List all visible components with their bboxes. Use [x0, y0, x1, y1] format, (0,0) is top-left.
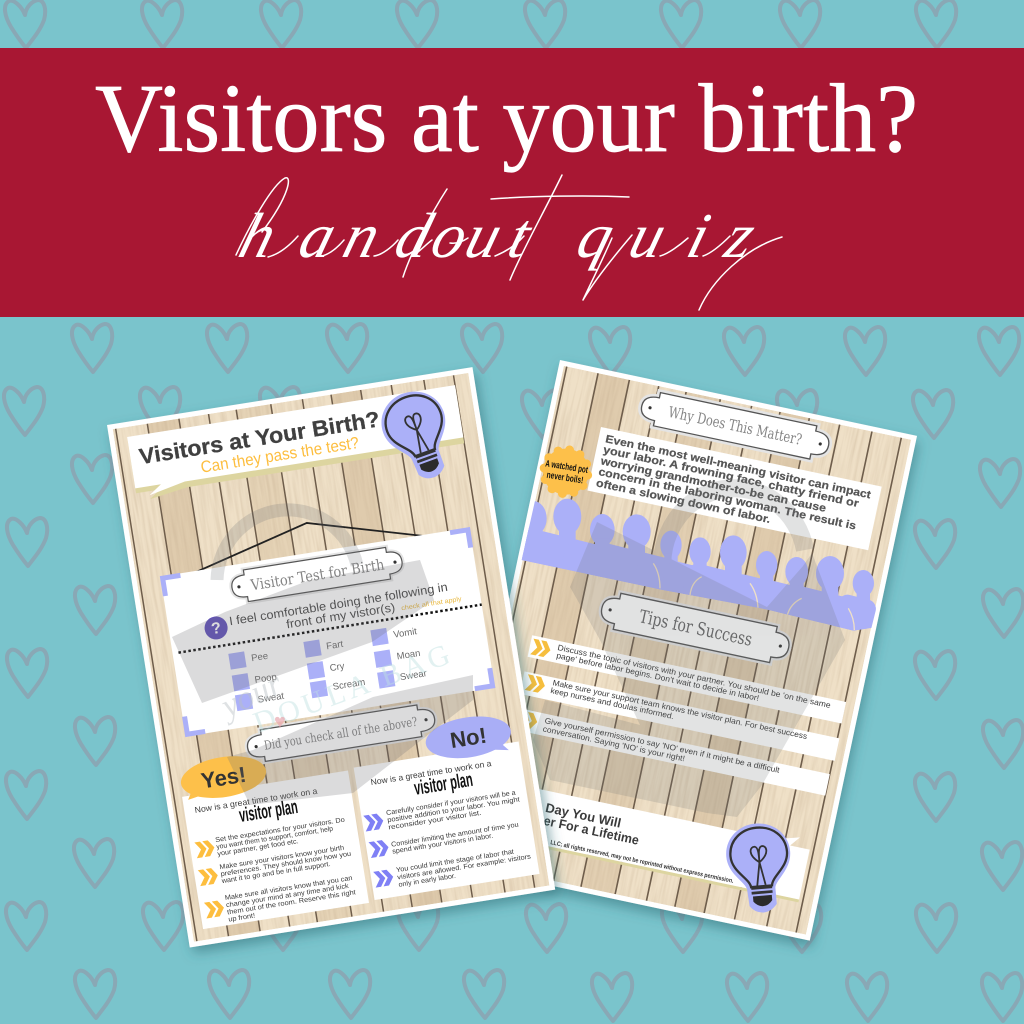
question text: front of my vistor(s) — [285, 600, 396, 631]
watermark overlay (page 1) — [172, 510, 473, 805]
panel: yes: visitor plan — [238, 796, 299, 827]
plaque: why does this matter: Why Does This Matter? — [667, 403, 804, 449]
icon: light bulb (page 2) — [724, 821, 795, 915]
tip 2 — [520, 671, 839, 761]
title banner — [0, 48, 1024, 317]
panel: no: positive addition to your labor. You might — [387, 796, 520, 824]
panel: yes: them out of the room. Reserve this right — [227, 889, 356, 916]
tip 3: Give yourself permission to say 'NO' even if it might be a difficult — [544, 716, 781, 775]
checklist — [228, 623, 428, 711]
tip 3: conversation. Saying 'NO' is your right! — [542, 724, 686, 763]
corner brackets — [163, 530, 493, 734]
plaque: tips for success: Tips for Success — [637, 606, 754, 651]
badge: a watched pot: A watched pot — [545, 458, 589, 476]
checklist: Vomit — [393, 626, 418, 641]
badge: a watched pot — [540, 445, 592, 498]
speech bubble: yes — [178, 751, 269, 804]
handout page 2: why does this matter — [453, 360, 917, 941]
tip 2: Make sure your support team knows the visitor plan. For best success — [552, 678, 808, 741]
panel: no: You could limit the stage of labor that — [396, 849, 514, 874]
explanation text box: your labor. A frowning face, chatty friend or — [602, 444, 861, 510]
panel: yes — [182, 771, 369, 929]
panel: yes: your partner, get food etc. — [217, 838, 299, 858]
title speech banner: Visitors at Your Birth? — [137, 406, 381, 469]
plaque: tips for success — [598, 590, 792, 666]
panel: yes: Set the expectations for your visitors. Do — [215, 817, 345, 844]
icon: question mark: ? — [210, 620, 222, 638]
panel: no — [354, 742, 540, 900]
panel: yes: Make sure all visitors know that you can — [224, 875, 353, 902]
paper and wood background — [453, 360, 917, 941]
panel: no: Now is a great time to work on a — [370, 758, 492, 787]
explanation text box: often a slowing down of labor. — [595, 477, 772, 526]
handout page 1: visitors at your birth — [107, 367, 555, 947]
panel: yes: Now is a great time to work on a — [194, 786, 318, 815]
checklist: Fart — [326, 639, 344, 652]
explanation text box: Even the most well-meaning visitor can impact — [604, 433, 872, 501]
tip 2: keep nurses and doulas informed. — [550, 686, 675, 721]
watermark overlay (page 2) — [533, 488, 845, 817]
icon: light bulb (page 1) — [373, 383, 464, 488]
plaque: did you check all — [245, 703, 437, 764]
explanation text box — [587, 427, 882, 550]
title speech banner — [127, 385, 465, 501]
panel: yes: change your mind at any time and kick — [226, 883, 350, 909]
question text: I feel comfortable doing the following in — [228, 580, 449, 628]
tip 1: page' before labor begins. Don't wait to decide in labor! — [556, 651, 760, 703]
watermark overlay (page 1): your — [213, 665, 289, 727]
title speech banner: Can they pass the test? — [199, 434, 360, 477]
tip 1: Discuss the topic of visitors with your partner. You should be 'on the same — [557, 643, 832, 710]
footer banner — [480, 772, 812, 902]
plaque: did you check all: Did you check all of the above? — [263, 714, 419, 753]
badge: a watched pot: never boils! — [546, 470, 584, 486]
panel: yes: want it to go and be in full support. — [220, 861, 331, 885]
hanging wire — [184, 504, 430, 575]
group of visitor silhouettes — [522, 498, 876, 630]
explanation text box: worrying grandmother-to-be can cause — [599, 455, 827, 515]
panel: yes: preferences. They should know how you — [220, 851, 352, 878]
footer banner: er For a Lifetime — [542, 813, 640, 848]
plaque: why does this matter — [638, 389, 832, 462]
script subtitle: handout quiz — [232, 201, 763, 272]
checklist: Swear — [399, 668, 428, 683]
panel: yes: you want them to support, comfort, help — [216, 826, 334, 851]
plaque: visitor test for birth — [230, 545, 404, 604]
panel: no: only in early labor. — [398, 873, 457, 889]
watermark overlay (page 1): ♥ — [274, 711, 286, 733]
footer banner: Day You Will — [544, 800, 623, 831]
icon: question mark — [203, 615, 229, 641]
visitor test panel — [160, 528, 495, 737]
checklist: Scream — [332, 677, 366, 693]
tip 3 — [512, 708, 830, 796]
panel: no: visitor plan — [413, 769, 474, 800]
panel: yes: up front! — [228, 913, 256, 924]
speech bubble: no: No! — [448, 723, 488, 753]
checklist: Pee — [250, 651, 269, 664]
tip 1 — [528, 635, 846, 723]
panel: no: reconsider your visitor list. — [388, 810, 482, 831]
script subtitle — [232, 175, 782, 310]
panel: no: visitors are allowed. For example: visitors — [397, 853, 532, 881]
checklist: Poop — [254, 672, 278, 686]
speech bubble: no — [423, 711, 514, 764]
panel: yes: Make sure your visitors know your birth — [219, 845, 345, 871]
question text: check all that apply — [401, 596, 463, 612]
explanation text box: concern in the laboring woman. The result is — [597, 466, 857, 533]
paper and wood background — [107, 367, 555, 947]
checklist: Cry — [329, 661, 346, 674]
watermark overlay (page 1): DOULA BAG — [249, 637, 458, 740]
main title: Visitors at your birth? — [95, 65, 918, 173]
panel: no: Consider limiting the amount of time you — [391, 822, 519, 849]
panel: no: spend with your visitors in labor. — [392, 833, 494, 856]
footer banner: LLC; all rights reserved, may not be reprinted without express permission. — [550, 839, 734, 885]
panel: no: Carefully consider if your visitors will be a — [386, 790, 516, 817]
plaque: visitor test for birth: Visitor Test for Birth — [249, 555, 386, 594]
checklist: Sweat — [257, 691, 285, 706]
checklist: Moan — [396, 648, 421, 662]
speech bubble: yes: Yes! — [199, 762, 248, 793]
question text — [228, 578, 463, 640]
